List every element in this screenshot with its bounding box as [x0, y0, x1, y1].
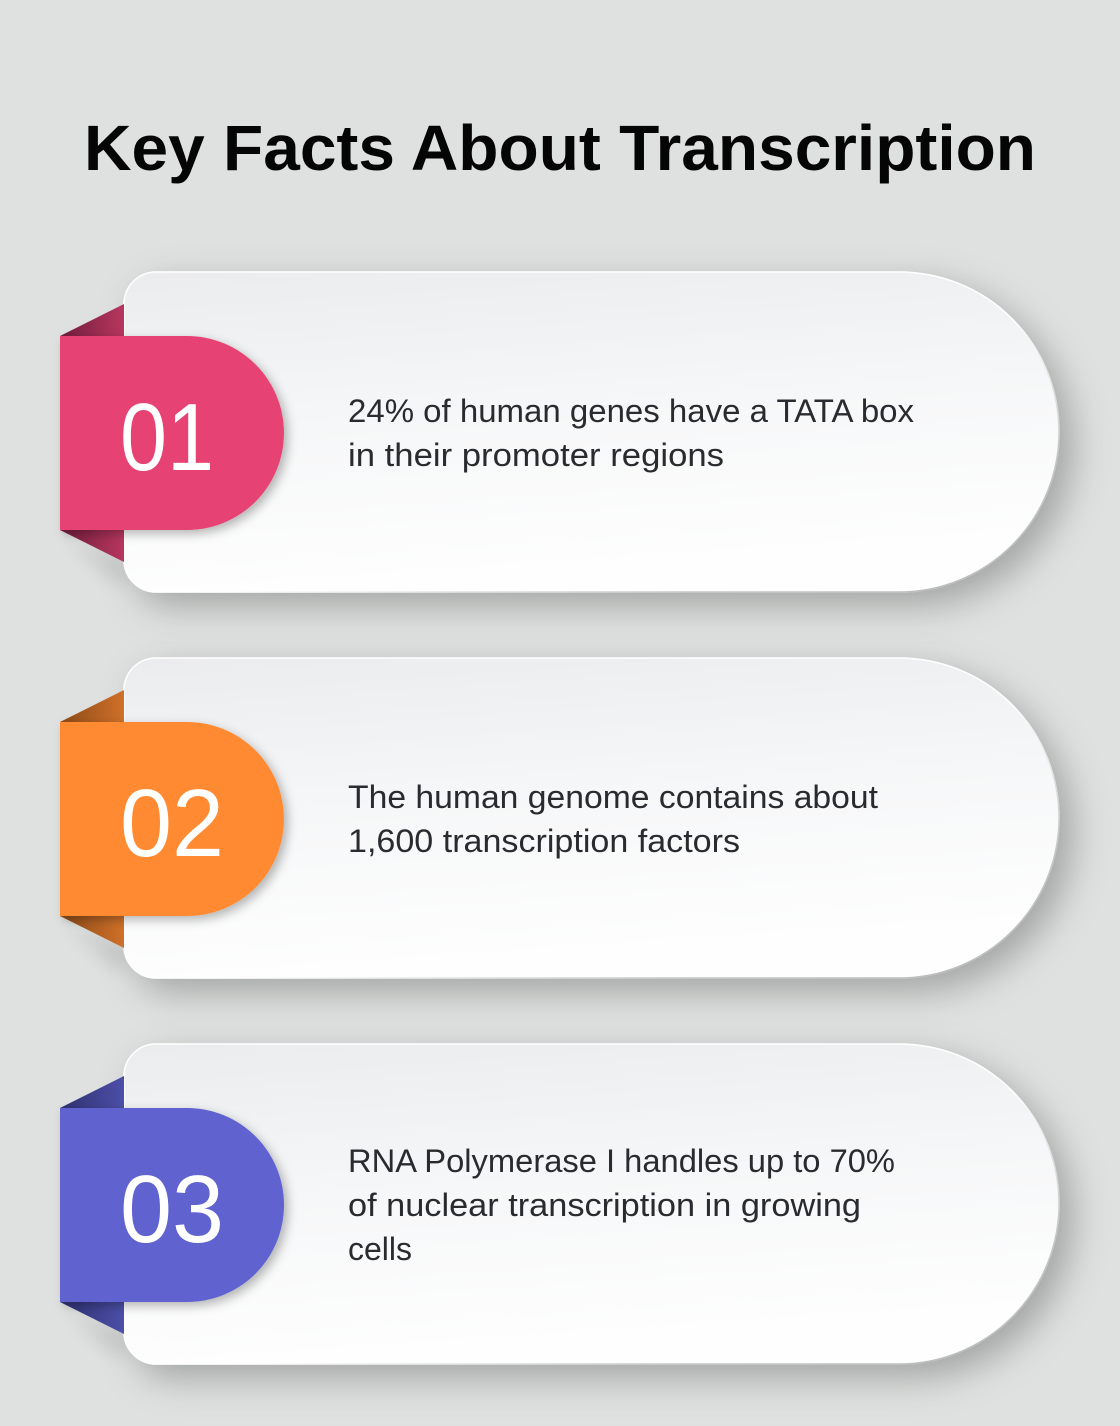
number 03: 03: [120, 1156, 224, 1263]
badge 02: [60, 722, 284, 916]
text 03: cells: [348, 1231, 412, 1267]
ribbon fold bottom 03: [60, 1302, 124, 1334]
title: Key Facts About Transcription: [84, 112, 1036, 184]
ribbon fold top 01: [60, 304, 124, 336]
ribbon fold top 02: [60, 690, 124, 722]
card 03: [124, 1044, 1059, 1364]
text 03: RNA Polymerase I handles up to 70%: [348, 1143, 895, 1179]
text 01: in their promoter regions: [348, 437, 724, 473]
badge 03: [60, 1108, 284, 1302]
panel: fact 01: [60, 272, 1059, 592]
panel: fact 02: [60, 658, 1059, 978]
text 01: [348, 393, 914, 473]
text 03: [348, 1143, 895, 1267]
text 03: of nuclear transcription in growing: [348, 1187, 861, 1223]
text 02: [348, 779, 878, 859]
ribbon fold bottom 02: [60, 916, 124, 948]
card 01: [124, 272, 1059, 592]
ribbon fold top 03: [60, 1076, 124, 1108]
ribbon fold bottom 01: [60, 530, 124, 562]
text 02: The human genome contains about: [348, 779, 878, 815]
number 02: 02: [120, 770, 224, 877]
text 01: 24% of human genes have a TATA box: [348, 393, 914, 429]
panel: fact 03: [60, 1044, 1059, 1364]
number 01: 01: [120, 384, 214, 491]
text 02: 1,600 transcription factors: [348, 823, 740, 859]
card 02: [124, 658, 1059, 978]
badge 01: [60, 336, 284, 530]
